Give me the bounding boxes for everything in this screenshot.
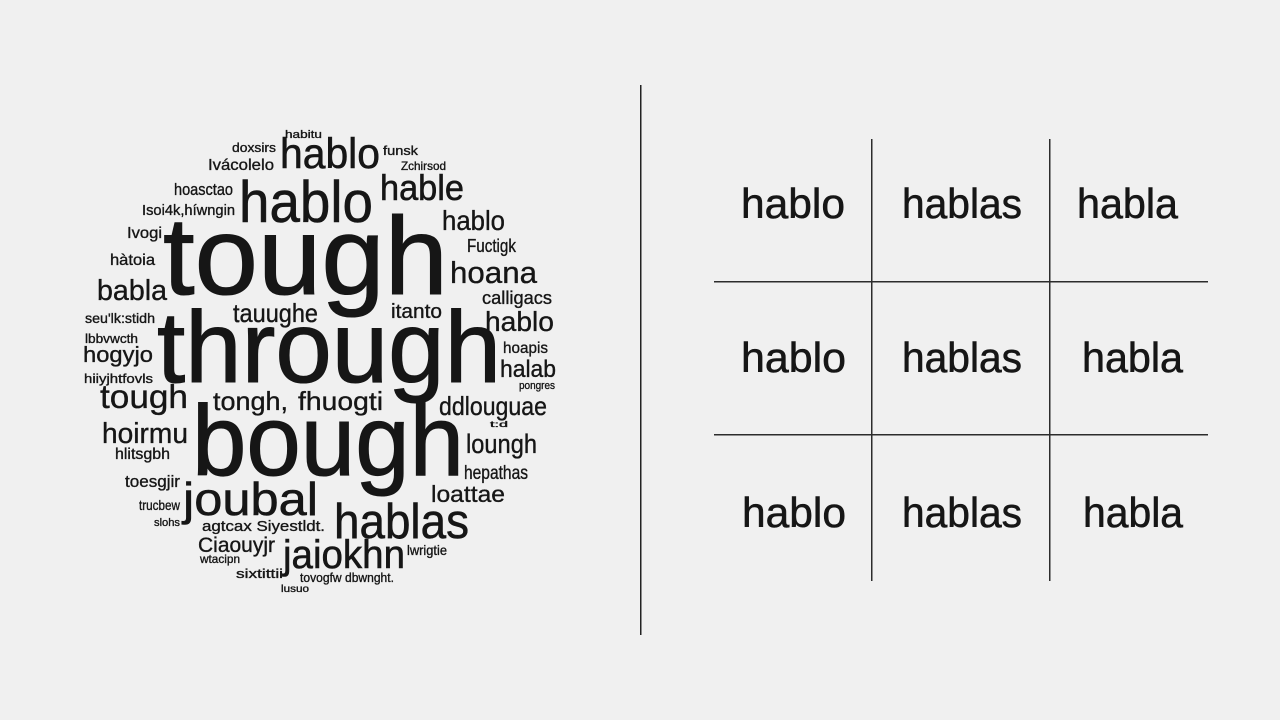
medium and small words: hlitsgbh [115,446,170,463]
row 3: hablas [902,489,1022,536]
medium and small words: lwrigtie [407,542,447,558]
word: through: through [157,292,501,404]
word: bough: bough [192,385,464,497]
row 1: habla [1077,180,1179,227]
panel: conjugation grid [714,139,1208,581]
medium and small words: halab [500,356,556,383]
word: tough: tough [163,195,448,318]
row 1 [741,180,1179,227]
word: hablas: hablas [334,495,469,549]
medium and small words: hiiyjhtfovls [84,371,154,386]
medium and small words: hoapis [503,340,548,357]
medium and small words: hàtoia [110,252,155,269]
medium and small words: babla [97,275,168,307]
medium and small words: doxsirs [232,140,277,155]
medium and small words: hablo [442,205,505,236]
medium and small words: sixtittii [236,566,283,581]
medium and small words: loattae [431,481,505,507]
row 3 [742,489,1184,536]
medium and small words: fhuogti [298,386,383,416]
medium and small words: Fuctigk [467,236,517,256]
medium and small words: tongh, [213,386,288,416]
row 3: habla [1083,489,1184,536]
medium and small words: habitu [285,129,322,141]
center divider [640,85,642,635]
row 1: hablas [902,180,1022,227]
medium and small words: hablo [485,306,554,337]
medium and small words: loungh [466,429,537,459]
medium and small words: hoasctao [174,180,233,199]
medium and small words: tough [100,378,188,415]
grid lines [714,139,1208,581]
row 2 [741,334,1184,381]
medium and small words: hogyjo [83,342,153,367]
medium and small words: hoirmu [102,418,188,450]
row 2: habla [1082,334,1184,381]
word: hablo top: hablo [280,130,380,178]
medium and small words [83,129,556,595]
medium and small words: hepathas [464,463,528,484]
medium and small words: Zchirsod [401,159,446,173]
medium and small words: trucbew [139,497,181,513]
panel: word cloud [83,129,556,595]
medium and small words: wtacipn [199,552,240,566]
medium and small words: tauughe [233,298,318,328]
medium and small words: toesgjir [125,472,180,491]
word: hablo large: hablo [239,170,373,235]
medium and small words: funsk [383,143,419,158]
medium and small words: calligacs [482,288,552,308]
medium and small words: pongres [519,380,555,392]
medium and small words: Ivogi [127,225,162,242]
medium and small words: itanto [391,301,442,323]
row 2: hablo [741,334,846,381]
medium and small words: Isoi4k,híwngin [142,202,235,219]
medium and small words: hable [380,167,464,208]
word: joubal: joubal [181,473,318,525]
medium and small words: seu'lk:stidh [85,310,155,326]
medium and small words: Ivácolelo [208,157,274,174]
medium and small words: lbbvwcth [85,331,138,346]
medium and small words: ddlouguae [439,391,547,421]
medium and small words: lusuo [281,584,310,595]
medium and small words: agtcax Siyestldt. [202,518,325,535]
medium and small words: Ciaouyjr [198,534,275,557]
medium and small words: t:d [490,420,508,429]
medium and small words: hoana [450,255,538,290]
row 3: hablo [742,489,846,536]
word: jaiokhn: jaiokhn [282,533,405,577]
row 1: hablo [741,180,845,227]
medium and small words: tovogfw dbwnght. [300,570,394,585]
medium and small words: slohs [154,517,180,529]
row 2: hablas [902,334,1022,381]
